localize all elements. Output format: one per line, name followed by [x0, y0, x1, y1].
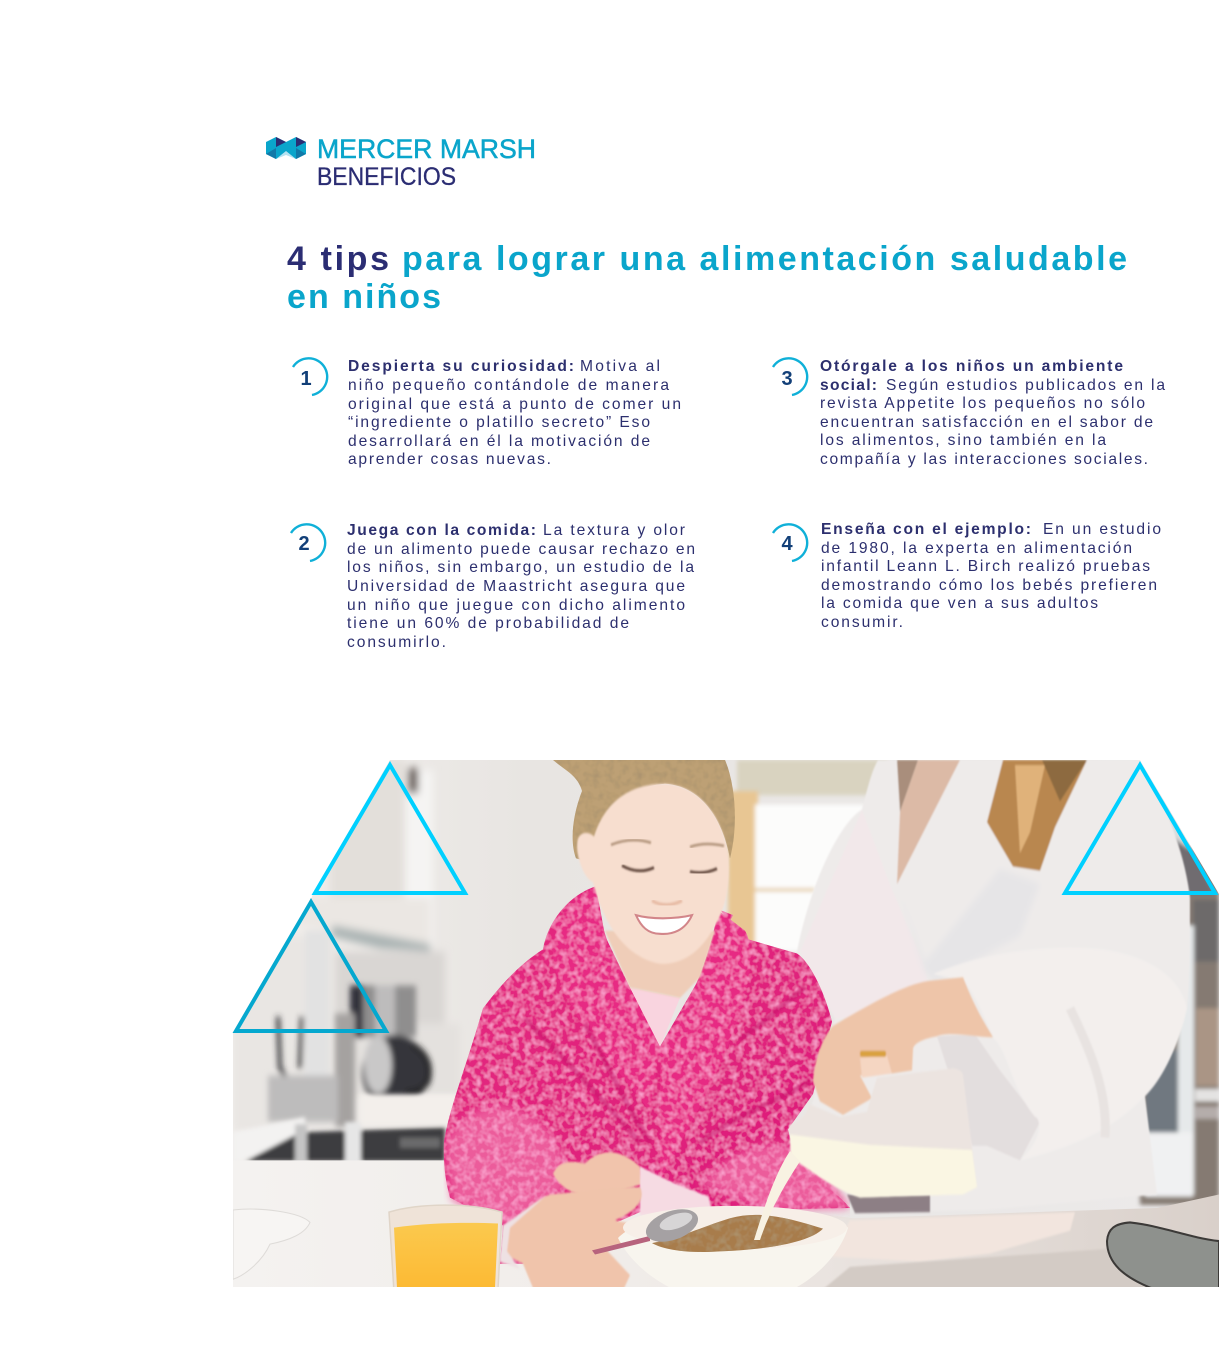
- text: tip 3: [820, 358, 1165, 468]
- window and frame: [728, 760, 887, 951]
- metal kitchen utensil: [1106, 1221, 1219, 1287]
- blurred faucet and coffee maker: [268, 931, 429, 1127]
- girl: face: [577, 784, 729, 964]
- text: tip 2: los niños, sin embargo, un estudio de la: [347, 559, 694, 576]
- text: tip 1: aprender cosas nuevas.: [348, 451, 551, 468]
- text: tip 1: “ingrediente o platillo secreto” Eso: [348, 414, 650, 431]
- text: tip 3: Otórgale a los niños un ambiente: [820, 358, 1123, 375]
- text: tip 4: En un estudio: [1043, 521, 1161, 538]
- text: tip 4: infantil Leann L. Birch realizó pruebas: [821, 558, 1150, 575]
- girl: robe: [444, 886, 850, 1264]
- table: [244, 1160, 1219, 1287]
- icon: number 3: 3: [781, 368, 793, 390]
- girl: lower hand: [500, 1187, 642, 1293]
- girl: shirt: [630, 988, 680, 1047]
- cereal bowl: [618, 1206, 848, 1287]
- text: tip 2: Juega con la comida:: [347, 522, 536, 539]
- text: tip 3: Según estudios publicados en la: [886, 377, 1165, 394]
- icon: number 1: [293, 358, 327, 395]
- girl: hair: [553, 760, 735, 863]
- text: tip 2: consumirlo.: [347, 634, 446, 651]
- icon: number 2: 2: [298, 533, 310, 555]
- text: tip 2: de un alimento puede causar rechazo en: [347, 541, 695, 558]
- text: tip 1: desarrollará en él la motivación de: [348, 433, 650, 450]
- title: [287, 240, 1127, 316]
- kitchen counter and sink: [233, 1094, 460, 1163]
- icon: logo mark: [266, 137, 306, 159]
- title: para lograr una alimentación saludable: [402, 240, 1127, 278]
- panel: tip 2: [291, 522, 695, 651]
- white cutout: top left: [233, 760, 390, 1032]
- girl: sleeve cuff: [640, 1167, 712, 1215]
- text: tip 3: encuentran satisfacción en el sabor de: [820, 414, 1153, 431]
- text: tip 2: La textura y olor: [543, 522, 685, 539]
- triangle: top right: [1065, 765, 1215, 893]
- text: tip 4: consumir.: [821, 614, 903, 631]
- girl: eyes: [622, 866, 717, 873]
- triangle: top left: [315, 765, 465, 893]
- spoon: [592, 1209, 698, 1254]
- panel: tip 3: [773, 358, 1165, 468]
- text: tip 4: [821, 521, 1161, 631]
- icon: number 1: 1: [300, 368, 312, 390]
- triangle: lower left: [236, 902, 386, 1031]
- shadow under milk jug: [847, 1194, 930, 1213]
- milk jug: [789, 1068, 977, 1198]
- text: tip 1: original que está a punto de comer un: [348, 396, 681, 413]
- logo text: Beneficios: BENEFICIOS: [317, 163, 456, 191]
- text: tip 4: de 1980, la experta en alimentación: [821, 540, 1132, 557]
- photo: girl and mother at breakfast: [233, 760, 1219, 1308]
- icon: number 4: [773, 524, 807, 561]
- text: tip 3: social:: [820, 377, 877, 394]
- milk stream: [754, 1151, 800, 1240]
- text: tip 3: compañía y las interacciones sociales.: [820, 451, 1148, 468]
- text: tip 3: los alimentos, sino también en la: [820, 432, 1106, 449]
- white plate: [233, 1209, 310, 1279]
- text: tip 4: demostrando cómo los bebés prefieren: [821, 577, 1157, 594]
- white cutout: top right: [1140, 760, 1219, 894]
- mother: robe: [797, 760, 1190, 1212]
- panel: tip 1: [293, 358, 681, 468]
- text: tip 2: tiene un 60% de probabilidad de: [347, 615, 629, 632]
- text: tip 1: Motiva al: [580, 358, 660, 375]
- girl: eyebrows: [611, 840, 724, 847]
- logo text: Mercer Marsh: MERCER MARSH: [317, 134, 536, 164]
- text: tip 1: Despierta su curiosidad:: [348, 358, 574, 375]
- girl: nose shadow: [652, 901, 682, 905]
- title: 4 tips: [287, 240, 389, 278]
- text: tip 4: la comida que ven a sus adultos: [821, 595, 1098, 612]
- logo: Mercer Marsh Beneficios: [266, 134, 536, 191]
- right background: [1140, 791, 1219, 1205]
- panel: tip 4: [773, 521, 1161, 631]
- mother: sleeve: [936, 963, 1180, 1094]
- girl: upper hand: [553, 1152, 642, 1196]
- icon: number 2: [291, 524, 325, 561]
- text: tip 4: Enseña con el ejemplo:: [821, 521, 1031, 538]
- text: tip 2: [347, 522, 695, 651]
- kitchen background: [238, 762, 446, 1126]
- full page canvas: [232, 137, 1219, 1287]
- girl: neck: [605, 931, 715, 998]
- text: tip 2: Universidad de Maastricht asegura que: [347, 578, 685, 595]
- text: tip 1: niño pequeño contándole de manera: [348, 377, 669, 394]
- girl: smile: [636, 915, 692, 934]
- icon: number 3: [773, 358, 807, 395]
- text: tip 1: [348, 358, 681, 468]
- title: en niños: [287, 278, 441, 316]
- girl: robe folds: [525, 988, 810, 1143]
- text: tip 3: revista Appetite los pequeños no sólo: [820, 395, 1145, 412]
- glass of orange juice: [388, 1204, 503, 1287]
- icon: number 4: 4: [781, 533, 793, 555]
- mother: inner sleeve: [937, 1034, 1040, 1160]
- text: tip 2: un niño que juegue con dicho alimento: [347, 597, 685, 614]
- mother: hand with ring: [813, 977, 993, 1115]
